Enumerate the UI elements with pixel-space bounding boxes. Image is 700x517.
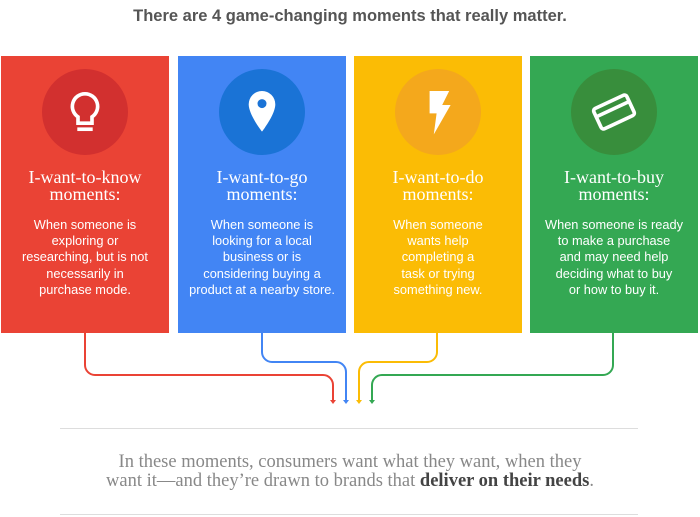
heading: moments:	[226, 184, 298, 204]
footer text	[106, 452, 594, 491]
text: When someone	[393, 217, 483, 232]
icon: pin	[219, 69, 305, 155]
text: necessarily in	[46, 266, 124, 281]
text: or how to buy it.	[569, 282, 659, 297]
heading: I-want-to-buy	[564, 167, 664, 187]
heading: moments:	[402, 184, 474, 204]
footer text: In these moments, consumers want what they want, when they	[119, 452, 581, 472]
heading	[217, 167, 307, 204]
footer text: want it—and they’re drawn to brands that deliver on their needs.	[106, 471, 594, 491]
text: to make a purchase	[558, 233, 670, 248]
text: exploring or	[52, 233, 118, 248]
text	[545, 217, 683, 297]
heading: I-want-to-go	[217, 167, 307, 187]
heading	[393, 167, 483, 204]
panel: buy	[530, 56, 698, 333]
title: There are 4 game-changing moments that really matter.	[133, 7, 567, 25]
heading	[29, 167, 142, 204]
panel: do	[354, 56, 522, 333]
text: deciding what to buy	[556, 266, 672, 281]
heading: I-want-to-do	[393, 167, 483, 187]
heading: moments:	[50, 184, 120, 204]
text: When someone is ready	[545, 217, 683, 232]
text	[393, 217, 483, 297]
text: researching, but is not	[22, 249, 148, 264]
icon: card	[571, 69, 657, 155]
text: task or trying	[401, 266, 475, 281]
text: something new.	[394, 282, 482, 297]
icon: lightbulb	[42, 69, 128, 155]
text	[22, 217, 148, 297]
text: business or is	[223, 249, 301, 264]
heading: I-want-to-know	[29, 167, 141, 187]
panel: go	[178, 56, 346, 333]
text	[189, 217, 335, 297]
heading: moments:	[578, 184, 650, 204]
text: When someone is	[34, 217, 136, 232]
panel: know	[1, 56, 169, 333]
icon: bolt	[395, 69, 481, 155]
text: and may need help	[560, 249, 668, 264]
text: wants help	[407, 233, 469, 248]
text: product at a nearby store.	[189, 282, 335, 297]
text: purchase mode.	[39, 282, 131, 297]
heading	[564, 167, 664, 204]
text: considering buying a	[203, 266, 321, 281]
text: looking for a local	[212, 233, 312, 248]
text: completing a	[402, 249, 474, 264]
text: When someone is	[211, 217, 313, 232]
